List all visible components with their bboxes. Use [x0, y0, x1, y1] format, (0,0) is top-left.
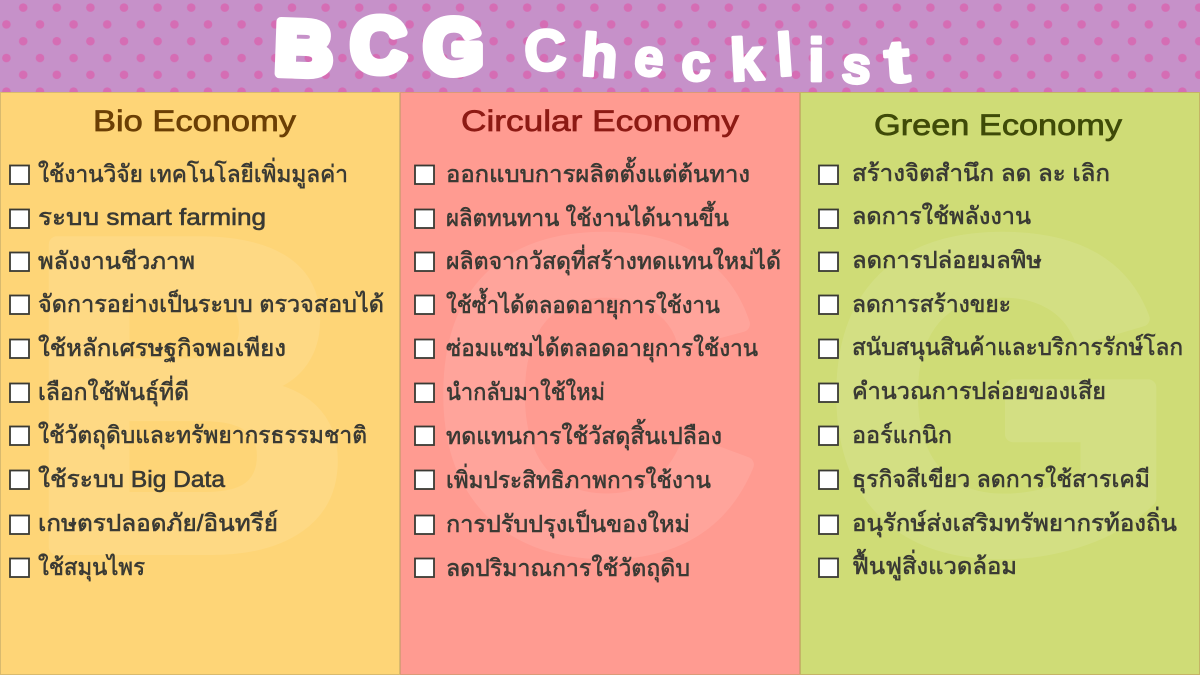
checklist: Circular Economy: เพิ่มประสิทธิภาพการใช้งาน — [446, 463, 711, 493]
checklist: Circular Economy: ทดแทนการใช้วัสดุสิ้นเปลือง — [446, 419, 722, 450]
checklist: Green Economy: ธุรกิจสีเขียว ลดการใช้สารเคมี — [852, 466, 1150, 493]
title: t — [882, 28, 912, 96]
title: i — [808, 27, 825, 94]
heading: Green Economy: Green Economy — [874, 109, 1122, 142]
checklist: Circular Economy: ผลิตจากวัสดุที่สร้างทดแทนใหม่ได้ — [446, 244, 781, 275]
checklist: Circular Economy: ผลิตทนทาน ใช้งานได้นานขึ้น — [446, 201, 729, 231]
title: C — [523, 18, 567, 84]
title: e — [632, 28, 667, 89]
title: c — [680, 34, 711, 93]
checklist: Green Economy: ลดการปล่อยมลพิษ — [852, 247, 1042, 273]
checklist: Bio Economy: เลือกใช้พันธุ์ที่ดี — [38, 375, 189, 406]
checklist: Circular Economy: ซ่อมแซมได้ตลอดอายุการใช้งาน — [446, 335, 758, 362]
watermark letter G: G — [826, 150, 1176, 641]
panel: Bio Economy — [0, 92, 400, 674]
checklist: Green Economy: สนับสนุนสินค้าและบริการรักษ์โลก — [852, 334, 1183, 361]
checklist: Green Economy: สร้างจิตสำนึก ลด ละ เลิก — [852, 160, 1110, 186]
checklist: Bio Economy: จัดการอย่างเป็นระบบ ตรวจสอบได้ — [38, 289, 384, 317]
checklist: Bio Economy: ใช้หลักเศรษฐกิจพอเพียง — [38, 335, 286, 362]
checklist: Green Economy — [819, 160, 1183, 581]
title: l — [774, 21, 796, 89]
checklist: Green Economy: ลดการสร้างขยะ — [852, 291, 1011, 317]
checklist: Bio Economy: ใช้วัตถุดิบและทรัพยากรธรรมชาติ — [38, 422, 367, 449]
checklist: Circular Economy: ใช้ซ้ำได้ตลอดอายุการใช้งาน — [446, 288, 720, 319]
checklist: Green Economy: คำนวณการปล่อยของเสีย — [852, 378, 1106, 404]
checklist: Bio Economy: พลังงานชีวภาพ — [38, 248, 195, 274]
title: G — [424, 5, 483, 90]
checklist: Circular Economy: การปรับปรุงเป็นของใหม่ — [446, 509, 690, 538]
heading: Circular Economy: Circular Economy — [461, 105, 739, 138]
panel: Green Economy — [800, 92, 1200, 674]
title: B — [273, 4, 334, 92]
watermark letter C: C — [433, 150, 758, 641]
checklist: Green Economy: ฟื้นฟูสิ่งแวดล้อม — [852, 549, 1017, 581]
checklist: Green Economy: อนุรักษ์ส่งเสริมทรัพยากรท้องถิ่น — [852, 506, 1177, 537]
title: k — [728, 25, 766, 94]
title: h — [579, 21, 620, 91]
checklist: Bio Economy: ใช้สมุนไพร — [38, 554, 145, 581]
checklist: Green Economy: ลดการใช้พลังงาน — [852, 203, 1031, 229]
heading: Bio Economy: Bio Economy — [93, 105, 296, 138]
checklist: Circular Economy: ลดปริมาณการใช้วัตถุดิบ — [446, 555, 690, 582]
checklist: Circular Economy: นำกลับมาใช้ใหม่ — [446, 379, 605, 405]
title — [273, 4, 912, 96]
checklist: Bio Economy: ระบบ smart farming — [38, 204, 266, 230]
title: s — [840, 36, 873, 96]
panel: Circular Economy — [400, 92, 800, 674]
checklist: Circular Economy: ออกแบบการผลิตตั้งแต่ต้นทาง — [446, 157, 750, 187]
watermark letter B: B — [27, 150, 350, 641]
checklist: Bio Economy: ใช้งานวิจัย เทคโนโลยีเพิ่มมูลค่า — [38, 157, 348, 189]
checklist: Green Economy: ออร์แกนิก — [852, 422, 952, 448]
checklist: Circular Economy — [415, 157, 781, 582]
checklist: Bio Economy — [10, 157, 384, 581]
title: C — [351, 4, 406, 88]
checklist: Bio Economy: ใช้ระบบ Big Data — [38, 466, 226, 492]
checklist: Bio Economy: เกษตรปลอดภัย/อินทรีย์ — [38, 510, 278, 536]
panel: title banner — [0, 0, 1200, 96]
